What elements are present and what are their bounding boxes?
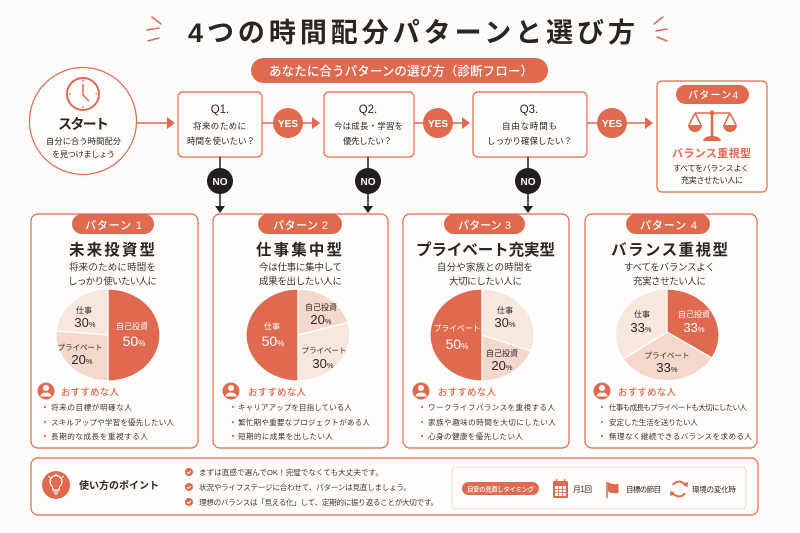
subtitle pill: diagnosis flow: あなたに合うパターンの選び方（診断フロー） [269,64,533,78]
panel: pattern 4: パターン 4 [640,219,697,232]
icon: check 3 [185,498,193,506]
pie chart: pattern 1: 20% [71,352,93,367]
icon: person [594,382,610,400]
icon: title sparkle right [654,17,667,41]
panel: usage tips footer [31,458,758,515]
pie chart: pattern 2 [246,289,350,381]
pie chart: pattern 4: 自己投資 [678,309,710,319]
panel: pattern 1: 将来のために時間を [69,262,156,274]
flow: question 1 [178,92,262,157]
flow: pattern 4 result: バランス重視型 [672,146,751,160]
panel: pattern 2: 成果を出したい人に [259,276,342,288]
panel: pattern 1: 未来投資型 [69,240,155,259]
title: 4つの時間配分パターンと選び方 [188,18,635,48]
flow: question 1: Q1. [211,104,229,116]
flow: pattern 4 result: 充実させたい人に [681,175,743,185]
pie chart: pattern 1: 仕事 [76,305,92,315]
panel: pattern 3: 自分や家族との時間を [437,262,533,274]
pie chart: pattern 1: 30% [74,315,96,330]
flow: YES 1 with arrow [262,108,320,138]
icon: scales [688,110,737,141]
panel: usage tips footer: 理想のバランスは「見える化」して、定期的に振り返ることが大切です。 [199,497,438,507]
flow: YES 1 with arrow: YES [278,119,298,130]
panel: review timing: 目安の見直しタイミング [467,484,534,494]
flow: NO 3 with arrow: NO [520,177,536,188]
panel: usage tips footer: 状況やライフステージに合わせて、パターンは見直しましょう。 [199,482,411,492]
icon: person [222,382,240,400]
panel: pattern 3 [403,214,569,448]
flow: question 3 [473,92,587,157]
panel: review timing: 月1回 [573,485,592,494]
panel: pattern 4: 充実させたい人に [633,276,706,288]
flow: NO 2 with arrow [355,157,381,213]
flow: question 2: 今は成長・学習を [334,121,403,131]
panel: pattern 2: 繁忙期や重要なプロジェクトがある人 [238,417,370,427]
flow: NO 1 with arrow [207,157,233,213]
panel: review timing [452,467,746,509]
flow: question 2: Q2. [359,104,377,116]
flow: YES 2 with arrow: YES [428,119,448,130]
icon: title sparkle left [147,17,161,41]
panel: pattern 4: すべてをバランスよく [624,262,715,274]
flow: YES 2 with arrow [414,108,470,138]
pie chart: pattern 1: 自己投資 [116,321,148,331]
flow: NO 1 with arrow: NO [212,177,228,188]
panel: pattern 3: プライベート充実型 [416,241,555,259]
pie chart: pattern 2: 自己投資 [305,302,337,312]
flow: NO 2 with arrow: NO [360,177,376,188]
panel: pattern 4: 安定した生活を送りたい人 [609,417,698,427]
panel: pattern 1 [31,214,198,448]
panel: pattern 1: 将来の目標が明確な人 [51,402,132,412]
panel: pattern 4 [585,214,757,448]
panel: pattern 3: 大切にしたい人に [449,276,522,288]
arrow: start to Q1 [137,117,175,129]
pie chart: pattern 2: 30% [312,356,334,371]
flow: start circle: スタート [58,116,109,132]
flow: start circle: 自分に合う時間配分 [46,136,121,146]
pie chart: pattern 2: 20% [310,312,332,327]
icon: calendar [553,479,568,498]
panel: pattern 2: おすすめな人 [248,388,306,398]
pie chart: pattern 2: プライベート [302,346,346,355]
panel: pattern 2: キャリアアップを目指している人 [238,402,352,412]
panel: pattern 3: パターン 3 [458,219,511,232]
panel: pattern 4: バランス重視型 [611,241,728,259]
flow: YES 3 with arrow [587,108,653,138]
panel: review timing: 環境の変化時 [692,484,736,494]
flow: question 3: 自由な時間も [502,121,557,131]
panel: usage tips footer: まずは直感で選んでOK！完璧でなくても大丈夫です。 [199,467,383,477]
pie chart: pattern 3: 50% [446,336,468,352]
pie chart: pattern 1: 50% [123,333,145,349]
pie chart: pattern 4: 仕事 [634,309,650,319]
panel: review timing: 目標の節目 [626,484,661,494]
panel: pattern 3: おすすめな人 [438,388,496,398]
flow: NO 3 with arrow [515,157,541,213]
icon: refresh [670,482,688,496]
pie chart: pattern 2: 50% [262,333,284,349]
panel: pattern 2: パターン 2 [273,219,328,232]
panel: pattern 1: パターン 1 [85,219,142,232]
pie chart: pattern 3: 30% [494,315,516,330]
flow: question 2: 優先したい？ [343,136,392,146]
pie chart: pattern 3 [430,289,534,381]
panel: pattern 4: 仕事も成長もプライベートも大切にしたい人 [609,402,747,412]
pie chart: pattern 4: 33% [630,320,652,335]
flow: start circle [30,68,136,174]
pie chart: pattern 4: 33% [683,320,705,335]
pie chart: pattern 3: 仕事 [497,305,513,315]
flow: question 2 [324,92,414,157]
pie chart: pattern 3: 自己投資 [486,348,518,358]
panel: pattern 4: おすすめな人 [618,388,676,398]
flow: question 1: 時間を使いたい？ [187,136,255,146]
flow: question 1: 将来のために [193,121,246,131]
panel: pattern 2: 短期的に成果を出したい人 [238,431,333,441]
panel: pattern 3: 心身の健康を優先したい人 [428,431,523,441]
panel: pattern 3: 家族や趣味の時間を大切にしたい人 [428,417,556,427]
flow: pattern 4 result: すべてをバランスよく [673,164,749,173]
icon: person [412,382,430,400]
pie chart: pattern 3: 20% [491,358,513,373]
icon: light bulb [42,471,70,499]
pie chart: pattern 1: プライベート [58,343,102,352]
pie chart: pattern 4: 33% [656,360,678,375]
panel: pattern 2: 今は仕事に集中して [259,262,342,274]
icon: check 1 [185,468,193,476]
panel: pattern 1: 長期的な成長を重視する人 [51,431,148,441]
pie chart: pattern 2: 仕事 [264,321,280,331]
panel: pattern 4: 無理なく継続できるバランスを求める人 [609,431,752,441]
icon: person [38,382,54,400]
pie chart: pattern 3: プライベート [434,324,480,333]
panel: pattern 2 [213,214,388,448]
panel: pattern 1: スキルアップや学習を優先したい人 [51,417,174,427]
flow: pattern 4 result: パターン4 [688,90,738,102]
flow: question 3: Q3. [520,104,538,116]
flow: YES 3 with arrow: YES [602,119,622,130]
panel: pattern 3: ワークライフバランスを重視する人 [428,402,555,412]
icon: check 2 [185,483,193,491]
panel: pattern 1: おすすめな人 [61,388,119,398]
panel: pattern 1: しっかり使いたい人に [68,276,157,288]
pie chart: pattern 1 [56,289,160,381]
flow: question 3: しっかり確保したい？ [487,136,572,146]
flow: pattern 4 result [657,81,767,192]
icon: clock [67,78,99,110]
icon: flag [607,482,618,498]
pie chart: pattern 4: プライベート [644,351,690,360]
pie chart: pattern 4 [615,289,719,381]
panel: usage tips footer: 使い方のポイント [79,479,159,492]
flow: start circle: を見つけましょう [52,150,115,159]
panel: pattern 2: 仕事集中型 [256,240,342,259]
subtitle pill: diagnosis flow [251,58,548,83]
